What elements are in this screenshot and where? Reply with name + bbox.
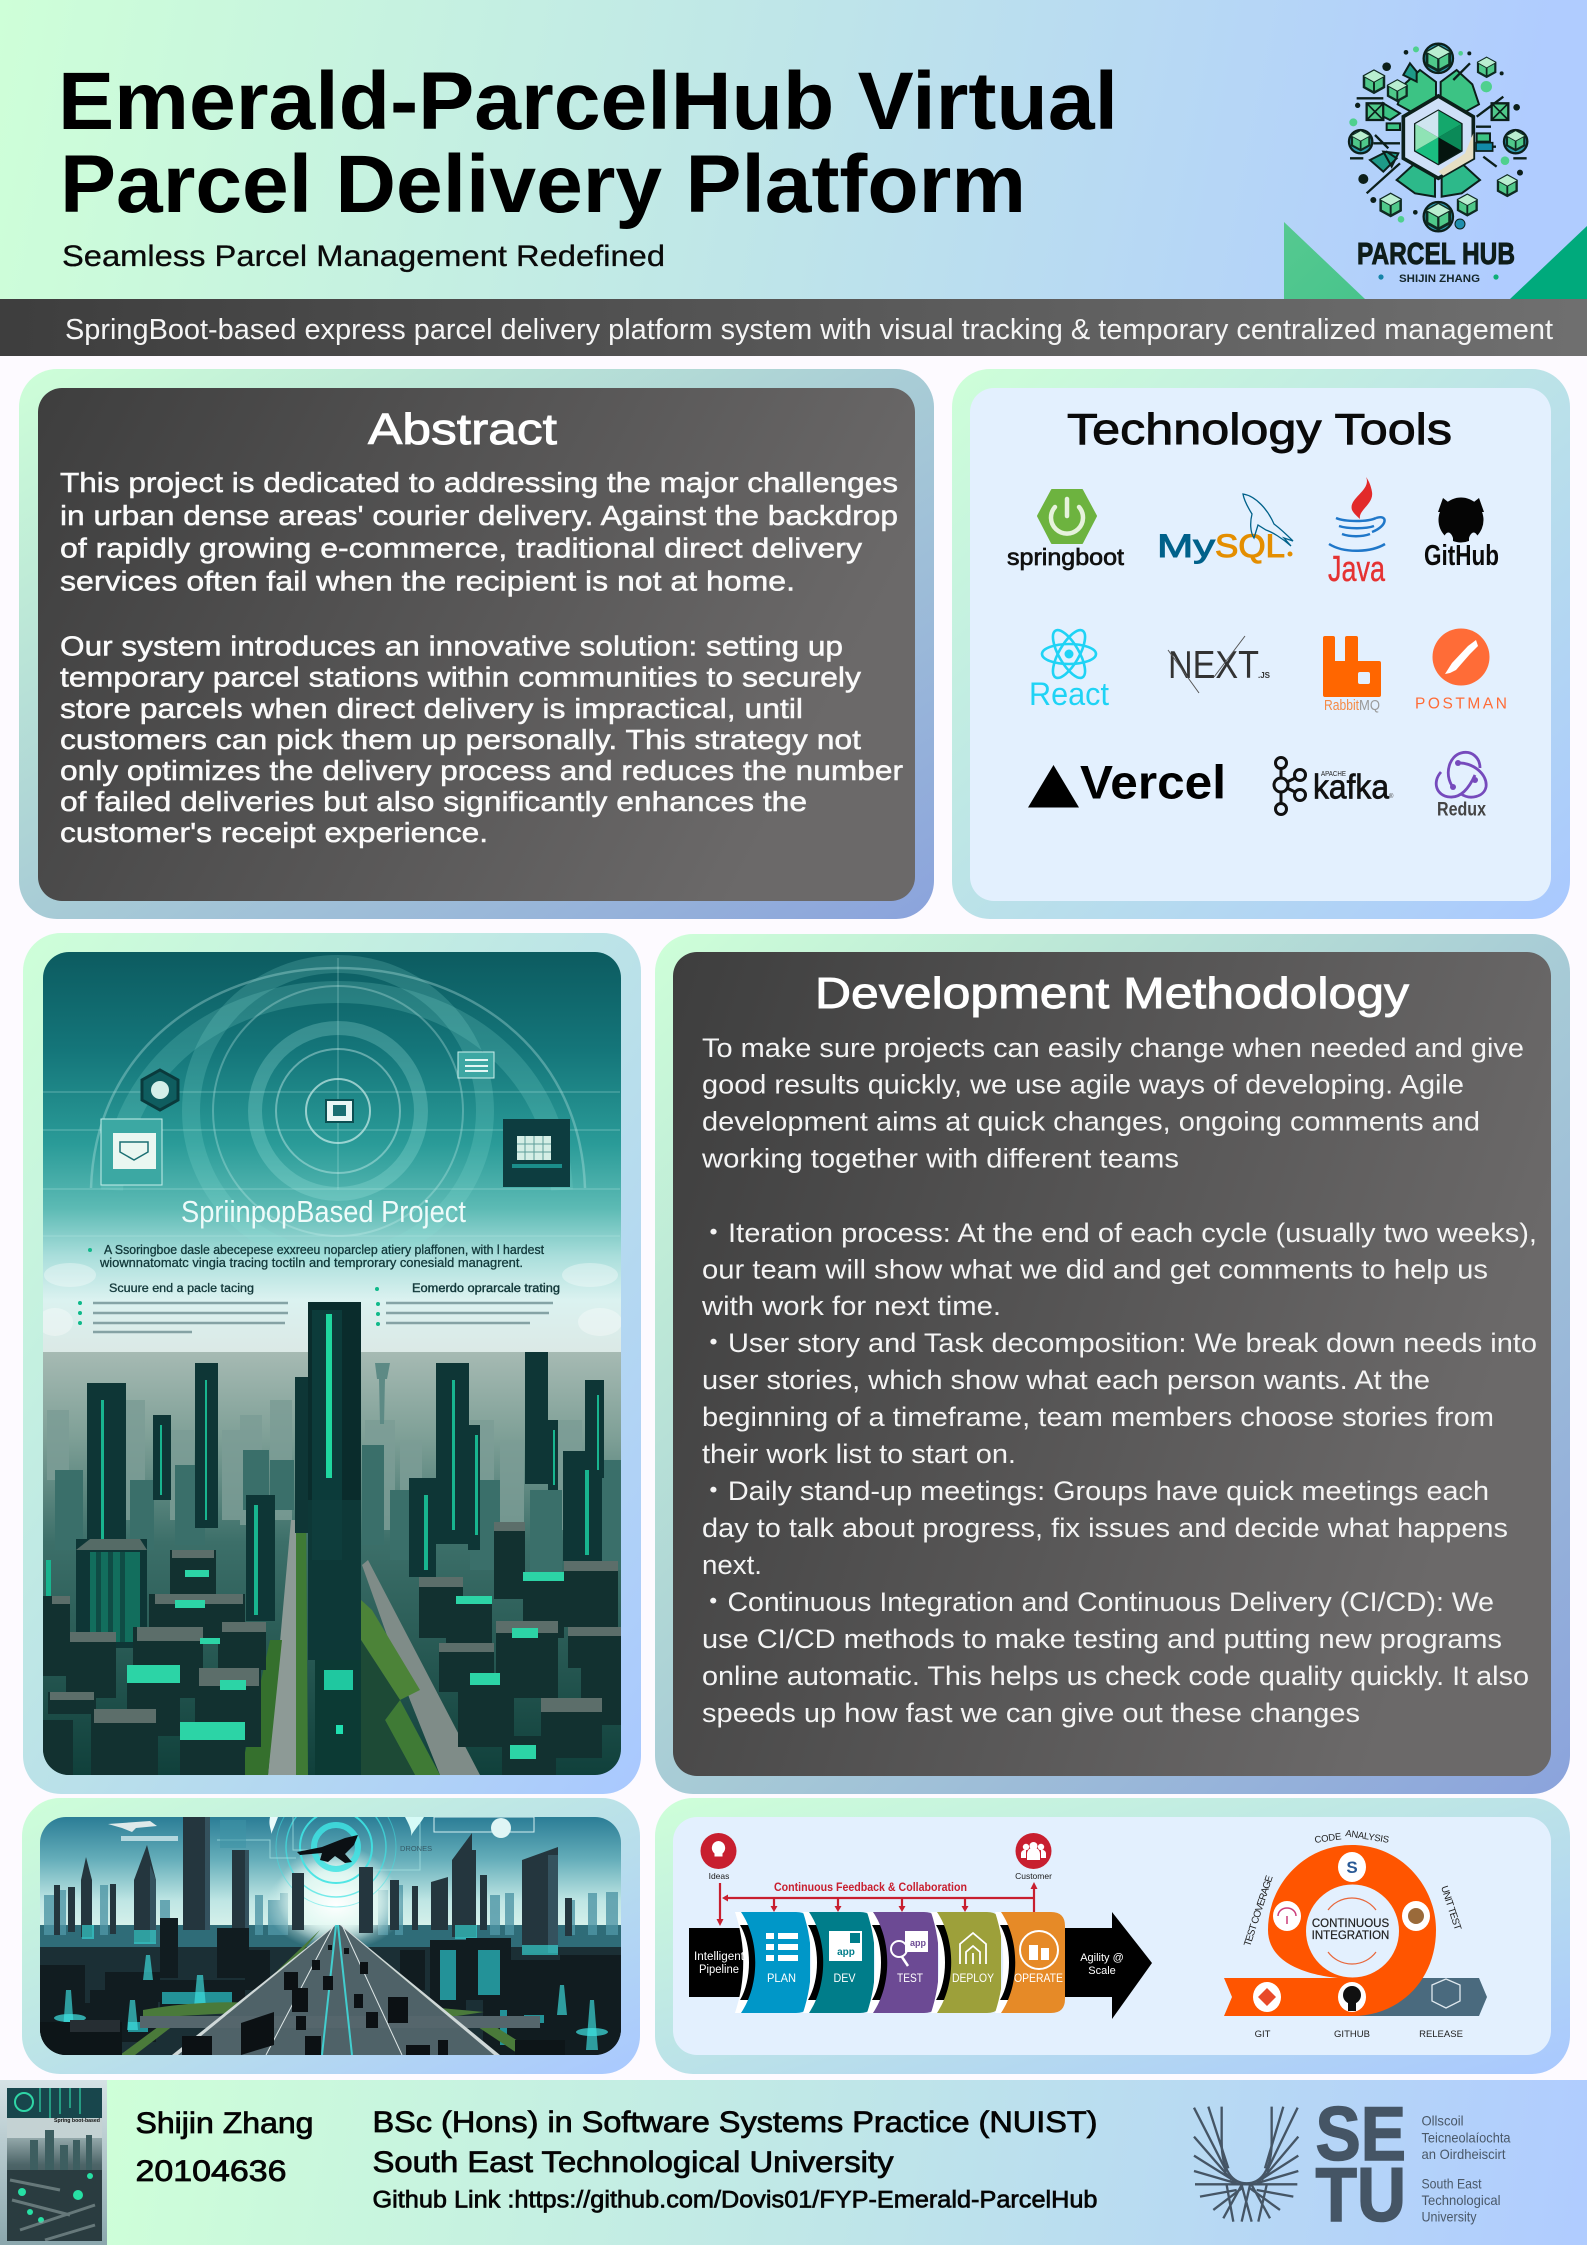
hologram title: SpriinpopBased Project xyxy=(181,1194,466,1229)
logo: SETU: South East xyxy=(1422,2176,1482,2192)
panel: abstract xyxy=(19,369,934,919)
continuous integration diagram: RELEASE xyxy=(1419,2029,1463,2040)
continuous integration diagram: TEST COVERAGE xyxy=(1242,1874,1276,1948)
panel: poster image: Eomerdo oprarcale trating xyxy=(412,1283,560,1295)
title: Emerald-ParcelHub Virtual xyxy=(58,56,1118,147)
programme block: South East Technological University xyxy=(372,2146,894,2179)
logo: apache kafka xyxy=(1274,758,1394,814)
pipeline diagram xyxy=(689,1833,1152,2019)
continuous integration diagram: CONTINUOUS xyxy=(1312,1918,1389,1930)
stage: deploy xyxy=(931,1912,1001,2013)
delivery trucks xyxy=(182,1945,448,2055)
logo: next.js: .JS xyxy=(1258,671,1271,680)
abstract body text: customer's receipt experience. xyxy=(60,817,488,848)
logo: SETU: TU xyxy=(1316,2153,1406,2238)
logo: SETU: Teicneolaíochta xyxy=(1422,2130,1511,2146)
methodology body text: To make sure projects can easily change when needed and give xyxy=(702,1033,1524,1063)
logo: SETU: an Oirdheiscirt xyxy=(1422,2146,1506,2162)
abstract body text: Our system introduces an innovative solution: setting up xyxy=(60,630,843,662)
logo: SETU: Ollscoil xyxy=(1422,2112,1464,2128)
continuous integration diagram: ANALYSIS xyxy=(1345,1828,1390,1846)
continuous integration diagram: S xyxy=(1346,1858,1358,1877)
stage: dev: DEV xyxy=(834,1973,856,1985)
stage: test: TEST xyxy=(897,1973,923,1985)
logo: postman: POSTMAN xyxy=(1415,696,1507,712)
abstract body text: store parcels when direct delivery is impractical, until xyxy=(60,693,803,724)
logo: redux: Redux xyxy=(1437,800,1486,820)
stage: operate xyxy=(995,1912,1065,2013)
panel: poster image: wiownnatomatc vingia tracing toctiln and temprorary conesiald managrent. xyxy=(99,1255,523,1270)
logo: react xyxy=(1029,626,1109,712)
stage: plan: PLAN xyxy=(767,1973,796,1985)
logo: mysql xyxy=(1157,494,1293,564)
distant haze buildings xyxy=(47,1400,582,1530)
logo: SETU: SE xyxy=(1316,2092,1406,2177)
title: Parcel Delivery Platform xyxy=(60,139,1026,230)
methodology body text: day to talk about progress, fix issues and decide what happens xyxy=(702,1513,1508,1543)
pipeline diagram: Agility @ xyxy=(1080,1952,1124,1964)
programme block: Github Link :https://github.com/Dovis01/FYP-Emerald-ParcelHub xyxy=(372,2186,1098,2214)
logo: Parcel Hub: SHIJIN ZHANG xyxy=(1399,273,1480,285)
feedback loop arrows xyxy=(720,1883,1034,1921)
clouds xyxy=(37,1263,622,1336)
stage: dev xyxy=(803,1912,874,2013)
skyscrapers xyxy=(54,1817,572,1953)
programme block: BSc (Hons) in Software Systems Practice (NUIST) xyxy=(372,2106,1098,2139)
methodology body text: use CI/CD methods to make testing and putting new programs xyxy=(702,1624,1502,1654)
logo: rabbitmq: MQ xyxy=(1359,697,1380,714)
methodology body text: our team will show what we did and get comments to help us xyxy=(702,1254,1488,1284)
methodology body text xyxy=(699,1033,1537,1728)
pipeline diagram: Pipeline xyxy=(699,1964,739,1976)
logo: mysql: SQL xyxy=(1215,528,1285,564)
abstract body text: only optimizes the delivery process and reduces the number xyxy=(60,755,903,786)
abstract body text: customers can pick them up personally. This strategy not xyxy=(60,724,861,755)
logo: springboot: springboot xyxy=(1007,544,1124,570)
continuous integration diagram: UNIT TEST xyxy=(1438,1885,1463,1932)
logo: apache kafka: kafka xyxy=(1313,768,1389,806)
pipeline diagram: Intelligent xyxy=(694,1951,745,1963)
mid-rise blocks xyxy=(43,1522,621,1775)
methodology body text: their work list to start on. xyxy=(702,1439,1016,1469)
icon: customer: Customer xyxy=(1015,1871,1052,1881)
title xyxy=(58,56,1118,230)
panel: technology tools xyxy=(952,369,1570,919)
road network xyxy=(268,1520,296,1775)
methodology body text: ・Daily stand-up meetings: Groups have quick meetings each xyxy=(699,1476,1489,1506)
logo: mysql: My xyxy=(1157,528,1215,564)
logo: redux xyxy=(1436,752,1486,820)
logo: postman xyxy=(1415,628,1507,712)
heading: abstract: Abstract xyxy=(368,405,557,454)
stage: dev: app xyxy=(837,1947,855,1958)
poster thumbnail: Spring boot-based xyxy=(54,2118,100,2124)
author block xyxy=(136,2107,314,2188)
methodology body text: ・Iteration process: At the end of each cycle (usually two weeks), xyxy=(699,1218,1537,1248)
distant skyline xyxy=(44,1885,618,1935)
stage: deploy: DEPLOY xyxy=(952,1973,994,1985)
logo: SETU: University xyxy=(1422,2208,1476,2224)
footer xyxy=(0,2080,1587,2245)
small drone top-left xyxy=(108,1821,157,1832)
stage: test: app xyxy=(910,1938,926,1948)
logo: react: React xyxy=(1029,676,1109,712)
methodology body text: user stories, which show what each person wants. At the xyxy=(702,1365,1430,1395)
logo: apache kafka: APACHE xyxy=(1321,771,1346,778)
icon: customer xyxy=(1015,1833,1052,1881)
logo: vercel: Vercel xyxy=(1080,756,1226,808)
logo: springboot xyxy=(1007,490,1124,570)
stage: plan xyxy=(735,1912,810,2013)
continuous integration diagram: GIT xyxy=(1255,2029,1271,2040)
tagline band xyxy=(0,299,1587,356)
continuous integration diagram: GITHUB xyxy=(1334,2029,1370,2040)
logo: SETU: Technological xyxy=(1422,2192,1500,2208)
programme block xyxy=(372,2106,1098,2214)
foreground buildings xyxy=(40,2022,122,2055)
abstract body text: services often fail when the recipient is not at home. xyxy=(60,566,795,596)
green hedges xyxy=(143,1930,320,2018)
logo: rabbitmq: Rabbit xyxy=(1324,697,1360,714)
abstract body text: This project is dedicated to addressing the major challenges xyxy=(60,467,898,498)
abstract body text: of rapidly growing e-commerce, traditional direct delivery xyxy=(60,532,862,564)
towers xyxy=(76,1352,604,1648)
methodology body text: working together with different teams xyxy=(701,1144,1179,1174)
author block: 20104636 xyxy=(136,2155,286,2188)
stage: operate: OPERATE xyxy=(1014,1973,1063,1985)
logo: rabbitmq xyxy=(1323,636,1381,714)
methodology body text: beginning of a timeframe, team members choose stories from xyxy=(702,1402,1494,1432)
methodology body text: online automatic. This helps us check code quality quickly. It also xyxy=(702,1661,1529,1691)
continuous integration diagram: CODE xyxy=(1314,1831,1342,1846)
methodology body text: development aims at quick changes, ongoing comments and xyxy=(702,1106,1480,1136)
logo: java xyxy=(1328,477,1386,589)
abstract body text xyxy=(60,467,903,848)
tagline band: SpringBoot-based express parcel delivery platform system with visual tracking & temporary centralized management xyxy=(65,314,1553,346)
panel: ci/cd diagrams xyxy=(655,1798,1570,2074)
cyan beacons xyxy=(63,1955,598,2050)
radar hud graphic xyxy=(43,958,620,1258)
methodology body text: ・User story and Task decomposition: We break down needs into xyxy=(699,1328,1537,1358)
logo: java: Java xyxy=(1328,548,1386,589)
abstract body text: in urban dense areas' courier delivery. Against the backdrop xyxy=(60,500,898,531)
heading: development methodology: Development Methodology xyxy=(815,969,1409,1018)
panel: poster image: A Ssoringboe dasle abecepese exxreeu noparclep atiery plaffonen, with l hardest xyxy=(104,1242,544,1257)
abstract body text: of failed deliveries but also significantly enhances the xyxy=(60,786,807,817)
cargo drone silhouette xyxy=(297,1835,358,1863)
icon: ideas xyxy=(700,1833,736,1881)
logo: github: GitHub xyxy=(1424,540,1499,572)
logo: apache kafka: ® xyxy=(1389,793,1394,800)
logo: Parcel Hub: PARCEL HUB xyxy=(1357,236,1515,271)
panel: poster image: Scuure end a pacle tacing xyxy=(109,1283,254,1295)
mid-ground blocks xyxy=(40,1918,621,2055)
icon: ideas: Ideas xyxy=(709,1871,729,1881)
drone radar rings xyxy=(276,1817,396,1908)
black pipeline arrow xyxy=(689,1912,1152,2019)
heading: technology tools: Technology Tools xyxy=(1067,405,1452,454)
continuous integration diagram xyxy=(1224,1828,1487,2040)
logo: next.js: NEXT xyxy=(1168,644,1259,687)
central tower xyxy=(308,1302,361,1660)
methodology body text: with work for next time. xyxy=(701,1291,1001,1321)
logo: Parcel Hub xyxy=(1284,44,1587,299)
logo: vercel xyxy=(1028,756,1226,808)
methodology body text: good results quickly, we use agile ways of developing. Agile xyxy=(702,1070,1464,1100)
abstract body text: temporary parcel stations within communities to securely xyxy=(60,662,861,692)
methodology body text: ・Continuous Integration and Continuous Delivery (CI/CD): We xyxy=(699,1587,1494,1617)
pipeline diagram: Continuous Feedback & Collaboration xyxy=(774,1882,967,1894)
pipeline diagram: Scale xyxy=(1088,1965,1116,1977)
methodology body text: next. xyxy=(702,1550,762,1580)
poster thumbnail xyxy=(0,2080,107,2245)
panel: poster image xyxy=(23,933,641,1794)
author block: Shijin Zhang xyxy=(136,2107,314,2140)
panel: city delivery image xyxy=(22,1787,640,2074)
header banner xyxy=(0,0,1587,299)
continuous integration diagram: INTEGRATION xyxy=(1312,1930,1389,1942)
subtitle: Seamless Parcel Management Redefined xyxy=(62,240,665,273)
panel: city delivery image: DRONES xyxy=(400,1844,432,1853)
main road xyxy=(178,1925,494,2055)
logo: SETU xyxy=(1194,2092,1511,2238)
panel: development methodology xyxy=(655,934,1570,1794)
logo: github xyxy=(1424,498,1499,572)
stage: test xyxy=(867,1912,938,2013)
methodology body text: speeds up how fast we can give out these changes xyxy=(702,1698,1360,1728)
